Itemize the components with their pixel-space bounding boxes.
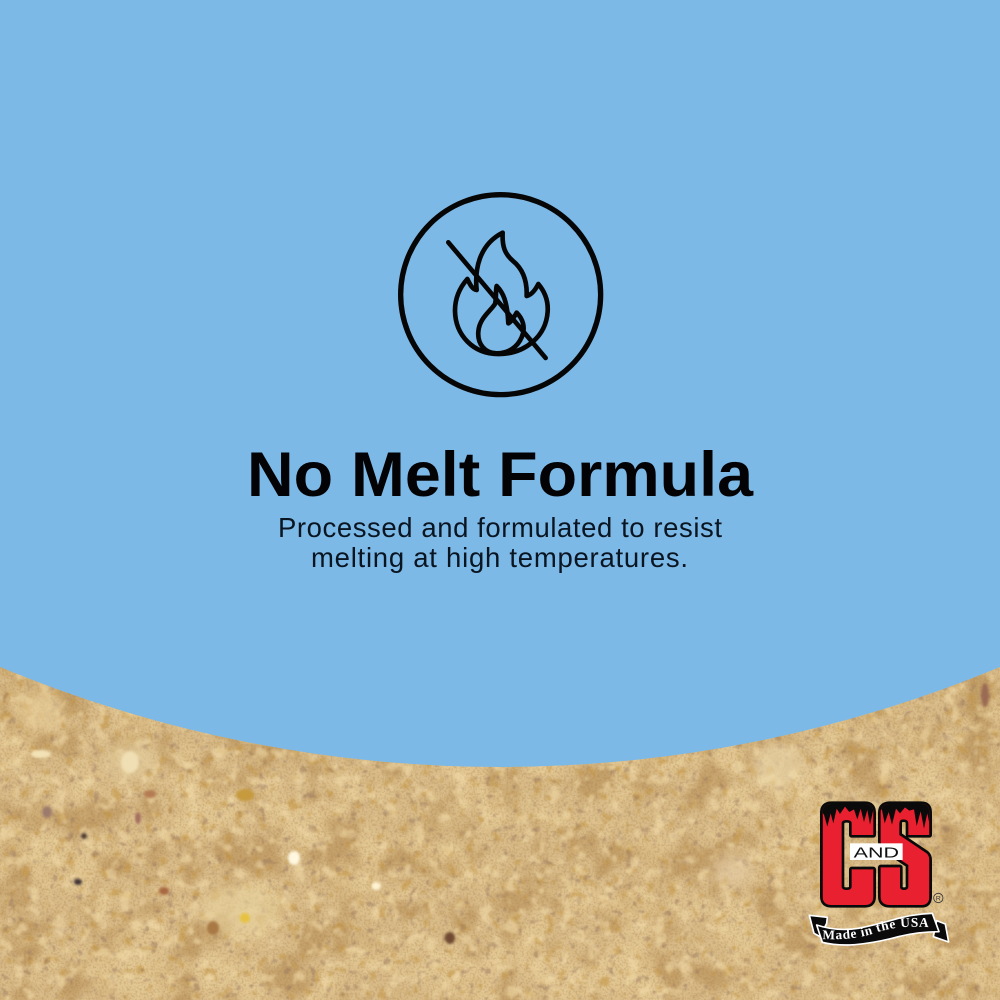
logo letters — [820, 800, 933, 908]
description text: melting at high temperatures. — [311, 542, 688, 573]
logo: C and S Made in the USA — [808, 801, 950, 946]
logo AND label — [850, 843, 903, 861]
description text — [278, 512, 722, 573]
description text: Processed and formulated to resist — [278, 512, 722, 543]
title: No Melt Formula — [247, 440, 754, 510]
icon slash — [448, 242, 546, 358]
logo banner — [808, 912, 950, 946]
icon inner flame — [478, 286, 524, 353]
logo AND label: AND — [854, 845, 899, 861]
grain texture band — [0, 660, 1000, 1000]
logo banner: Made in the USA — [822, 918, 928, 940]
icon: crossed-out flame in circle — [401, 195, 601, 395]
logo registered mark — [934, 893, 943, 903]
icon ring — [401, 195, 601, 395]
logo registered mark: R — [936, 895, 941, 902]
icon flame outline — [455, 233, 548, 354]
